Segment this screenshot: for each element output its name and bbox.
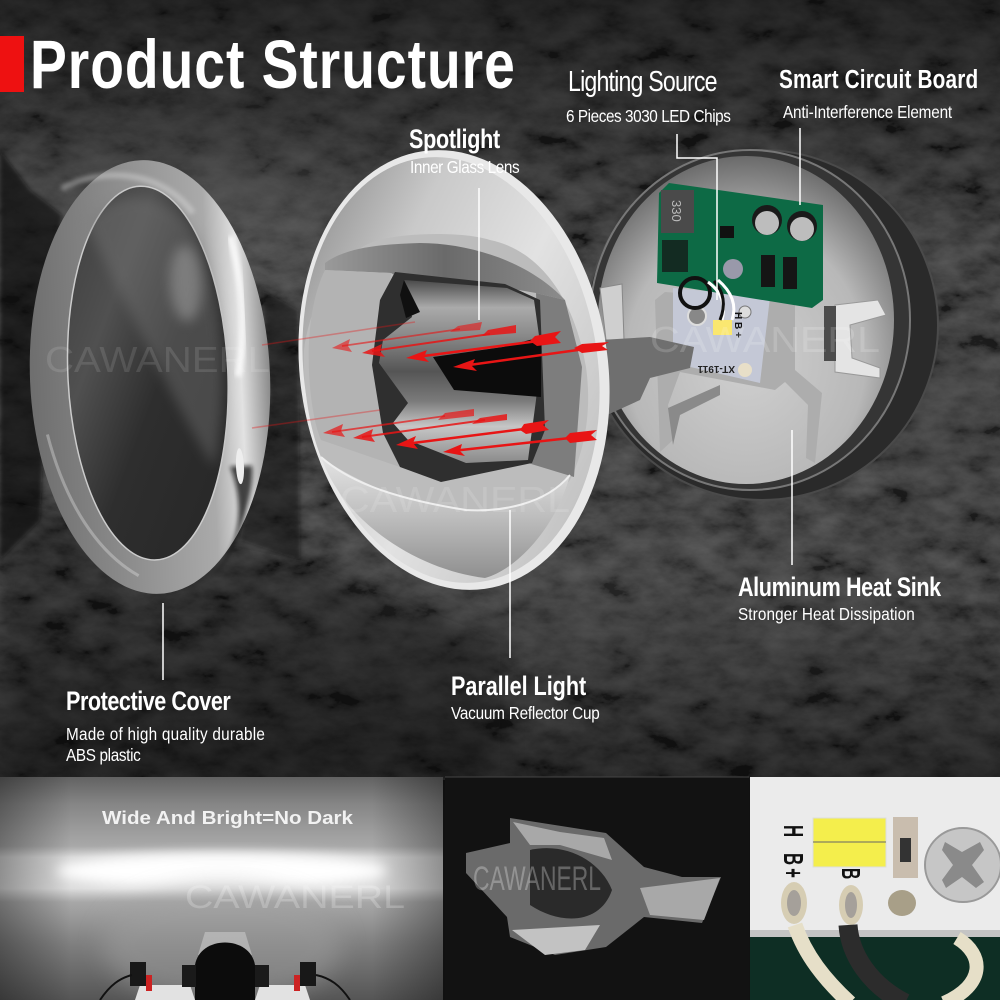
connector behind reflector <box>598 337 694 415</box>
panel: LED macro photo <box>750 777 1000 1000</box>
panel: LED macro photo: B+ <box>778 853 809 881</box>
lens opening <box>372 272 545 482</box>
label: lighting source <box>566 64 731 126</box>
watermark: heat sink: CAWANERL <box>650 319 880 360</box>
watermark: reflector: CAWANERL <box>340 479 570 520</box>
bottom lip <box>321 457 570 578</box>
watermark: CAWANERL <box>185 879 405 915</box>
background: dark rocky landscape <box>0 0 1000 780</box>
panel: lens product photo <box>445 777 749 1000</box>
reflector cup <box>252 130 637 610</box>
aluminum LED board: H B + <box>732 312 743 338</box>
upper dark band <box>325 243 565 300</box>
heat sink bracket <box>600 284 886 463</box>
label: protective cover: Made of high quality durable <box>66 724 265 744</box>
protective cover lens <box>21 155 279 599</box>
label: protective cover <box>66 687 265 765</box>
circuit board: 330 <box>669 200 684 222</box>
label: aluminum heat sink: Stronger Heat Dissipation <box>738 604 915 624</box>
label: smart circuit board <box>779 65 978 122</box>
right wall <box>528 293 582 477</box>
panel: wide beam photo <box>0 777 443 1000</box>
solder pads <box>781 882 807 924</box>
title bar accent <box>0 36 24 92</box>
watermark: cover: CAWANERL <box>45 339 270 380</box>
circuit board <box>657 183 823 320</box>
heat sink housing <box>586 150 938 500</box>
label: protective cover: Protective Cover <box>66 687 231 717</box>
label: aluminum heat sink <box>738 573 942 624</box>
label: smart circuit board: Smart Circuit Board <box>779 65 978 94</box>
label: protective cover: ABS plastic <box>66 745 141 765</box>
left wall <box>309 270 400 467</box>
label: lighting source: 6 Pieces 3030 LED Chips <box>566 106 731 126</box>
red arrows <box>252 322 609 456</box>
inner glass lens <box>379 280 541 463</box>
yellow LED <box>813 818 886 867</box>
headlight unit <box>100 932 350 1000</box>
label: aluminum heat sink: Aluminum Heat Sink <box>738 573 942 603</box>
label: lighting source: Lighting Source <box>568 64 718 98</box>
label: parallel light <box>451 672 600 723</box>
cup interior <box>304 234 588 510</box>
label: parallel light: Parallel Light <box>451 672 586 702</box>
watermark: CAWANERL <box>473 860 601 898</box>
aluminum LED board <box>673 288 770 383</box>
label: spotlight <box>409 125 520 177</box>
label: spotlight: Spotlight <box>409 125 500 155</box>
panel: LED macro photo: B <box>836 868 865 879</box>
label: smart circuit board: Anti-Interference Element <box>783 102 952 122</box>
screw <box>925 828 1000 902</box>
leader lines <box>163 128 800 680</box>
wires <box>795 925 850 1000</box>
caption: Wide And Bright=No Dark <box>102 808 354 828</box>
title: Product Structure <box>30 26 515 103</box>
aluminum LED board: XT-1911 <box>697 363 735 374</box>
label: parallel light: Vacuum Reflector Cup <box>451 703 600 723</box>
resistor <box>893 817 918 878</box>
label: spotlight: Inner Glass Lens <box>410 157 520 177</box>
board lettering: H <box>778 825 809 837</box>
